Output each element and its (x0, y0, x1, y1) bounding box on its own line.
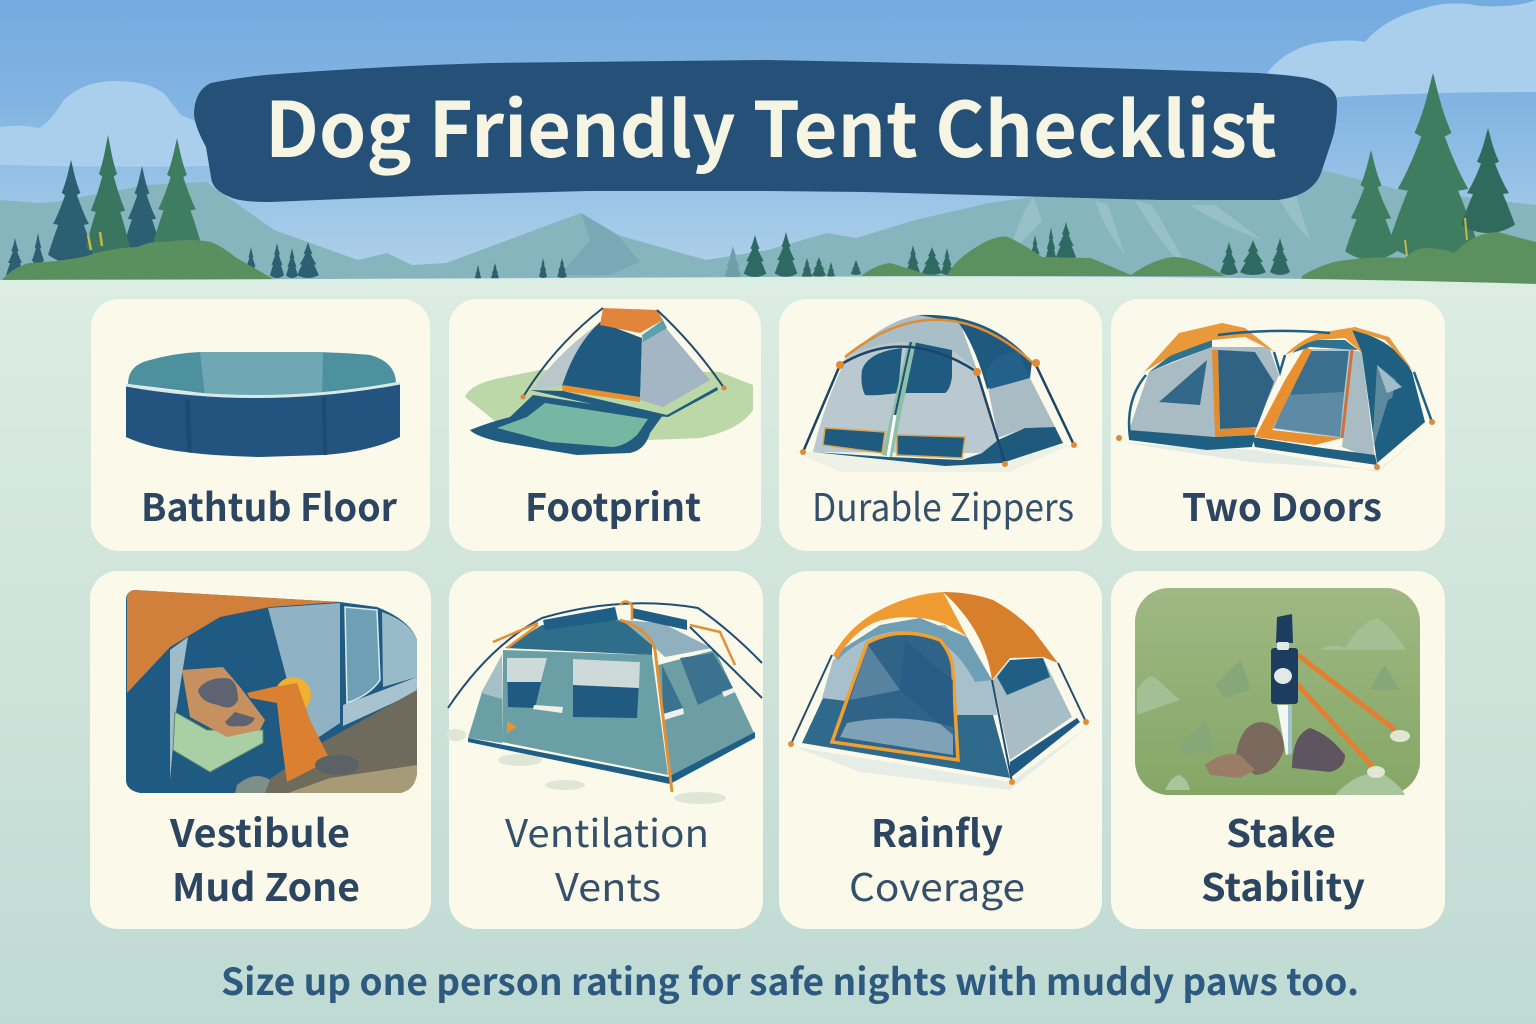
card: Ventilation Vents (446, 571, 763, 929)
background: clouds (0, 0, 1536, 167)
card: Vestibule Mud Zone (90, 571, 431, 929)
label: Vents (555, 857, 661, 912)
label: Bathtub Floor (141, 477, 397, 532)
icon: tent with rainfly (788, 592, 1090, 790)
icon: ventilation tent (446, 602, 762, 804)
icon: stake in ground (1135, 588, 1420, 795)
card: Two Doors (1111, 299, 1445, 551)
label: Two Doors (1182, 477, 1382, 532)
label: Vestibule (169, 803, 350, 858)
card: Footprint (449, 299, 761, 551)
background: meadow (0, 276, 1536, 1024)
icon: tent with zippers (795, 315, 1077, 472)
card: Bathtub Floor (91, 299, 430, 551)
footer note: Size up one person rating for safe nights with muddy paws too. (221, 952, 1359, 1006)
icon: vestibule mud zone (126, 590, 417, 793)
label: Coverage (849, 857, 1025, 912)
label: Stake (1226, 803, 1336, 858)
icon: tent with two doors (1116, 323, 1435, 472)
label: Durable Zippers (812, 477, 1074, 532)
label: Ventilation (505, 803, 709, 858)
icon: bathtub floor (126, 352, 400, 457)
card: Stake Stability (1111, 571, 1445, 929)
background: tree lines and bushes (2, 73, 1536, 286)
icon: tent on footprint (465, 308, 753, 455)
card: Rainfly Coverage (779, 571, 1102, 929)
card: Durable Zippers (779, 299, 1102, 551)
label: Mud Zone (172, 857, 360, 912)
background: mountains (0, 170, 1536, 285)
title banner (194, 60, 1337, 202)
label: Stability (1201, 857, 1365, 912)
label: Footprint (525, 477, 701, 532)
title text: Dog Friendly Tent Checklist (265, 69, 1277, 179)
label: Rainfly (871, 803, 1003, 858)
background: sky (0, 0, 1536, 290)
